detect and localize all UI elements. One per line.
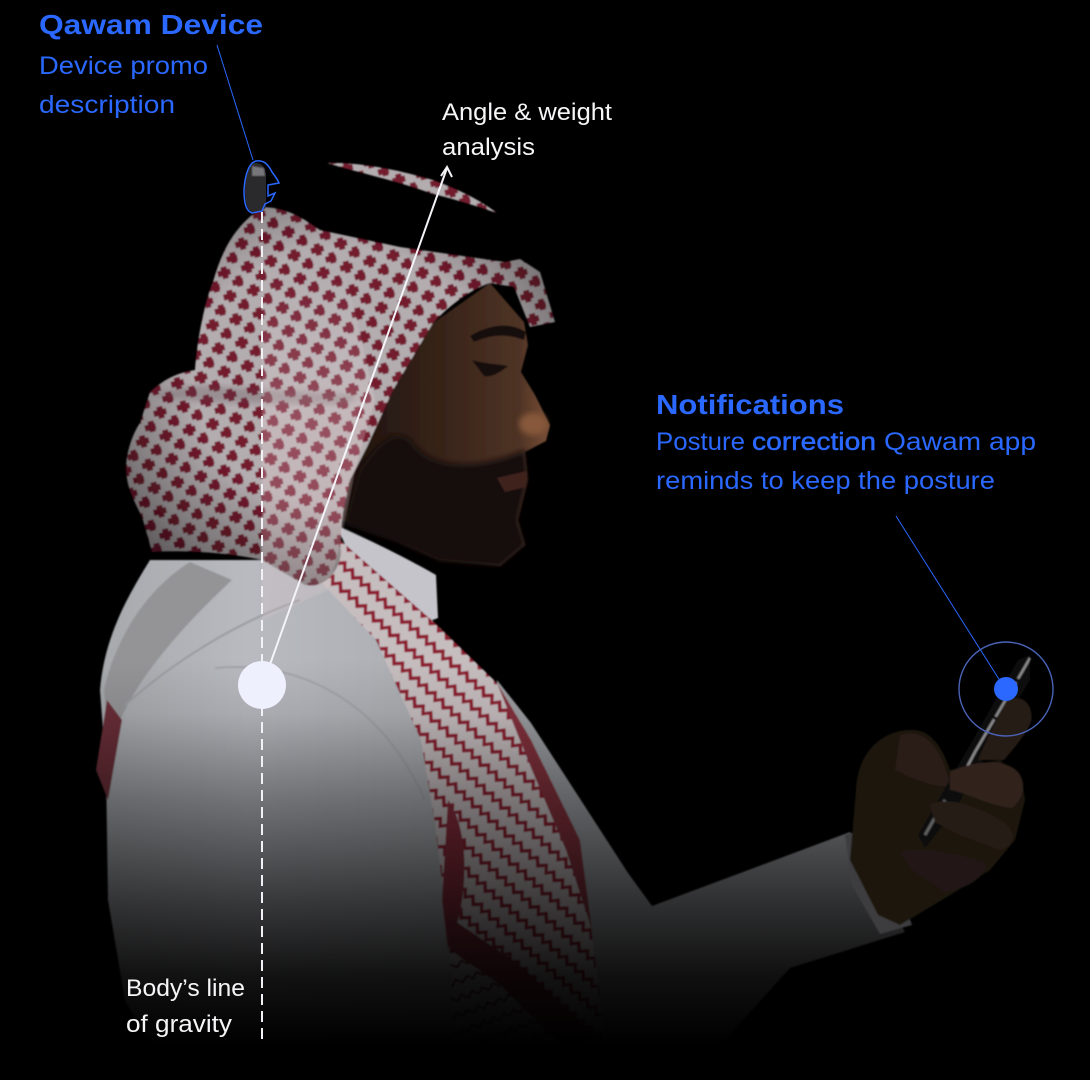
text: notifications description: reminds to keep the posture [656, 467, 995, 495]
leader line: notifications [896, 516, 1002, 684]
device on head [244, 161, 279, 213]
bottom fade [0, 660, 1090, 1045]
lower finger [900, 850, 986, 892]
middle finger [930, 801, 1013, 850]
label: body's line of gravity [126, 975, 245, 1038]
shoulder yoke shading [104, 562, 232, 745]
collar [336, 525, 438, 625]
index finger behind phone [978, 698, 1031, 760]
eye [472, 360, 508, 376]
device outline [244, 161, 279, 213]
head cloth [126, 207, 555, 586]
device body [245, 163, 266, 212]
phone marker ring [959, 642, 1053, 736]
text: device description: description [39, 91, 175, 119]
translucent veil beside gravity line [262, 270, 375, 620]
heading: Notifications: Notifications [656, 389, 844, 420]
red cloth at left edge [96, 700, 122, 800]
shoulder seam [125, 600, 300, 705]
cuff [845, 826, 912, 934]
angle arrow [268, 167, 452, 670]
chest scarf [300, 540, 605, 1045]
scarf red band [497, 683, 592, 930]
upper cloth crescent [327, 163, 497, 213]
phone marker dot [994, 677, 1018, 701]
phone body [918, 655, 1030, 848]
dashed gravity line [261, 212, 263, 1042]
eyebrow [470, 326, 526, 342]
nose highlight [519, 413, 547, 435]
label: body's line of gravity: Body’s line [126, 975, 245, 1002]
text: notifications description: Posture [656, 428, 745, 456]
label: body's line of gravity: of gravity [126, 1011, 232, 1038]
label: angle and weight analysis: Angle & weight [442, 99, 612, 126]
head cloth edge shading [126, 207, 555, 586]
shirt body [100, 560, 470, 1045]
sleeve [497, 680, 905, 1045]
label: angle and weight analysis [442, 99, 612, 161]
scarf lower herringbone [450, 950, 560, 1045]
scarf inner red stripe [442, 800, 464, 950]
text: notifications description [656, 428, 1036, 495]
heading: Qawam Device: Qawam Device [39, 9, 263, 40]
lips [497, 471, 527, 492]
face [342, 283, 550, 566]
fist [850, 730, 1025, 925]
text: device description [39, 52, 208, 119]
phone edge highlight [955, 658, 1030, 790]
text: device description: Device promo [39, 52, 208, 80]
scarf lower stripes [446, 915, 600, 1045]
device highlight [252, 166, 265, 176]
thumb [895, 733, 950, 786]
label: angle and weight analysis: analysis [442, 134, 535, 161]
drape fold [150, 385, 360, 405]
text: notifications description: correction [752, 428, 876, 456]
centre of gravity dot [238, 661, 286, 709]
photo: man in keffiyeh [96, 163, 905, 1045]
upper finger [950, 762, 1023, 808]
leader line: device [217, 45, 253, 160]
beard [345, 436, 528, 567]
hand and phone [845, 655, 1031, 934]
text: notifications description: Qawam app [884, 428, 1036, 456]
